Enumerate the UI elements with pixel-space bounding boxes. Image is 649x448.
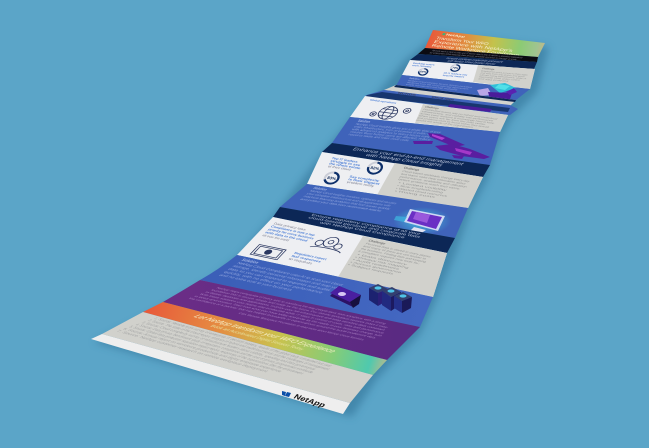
challenge text: the business. Finding data and keeping [360,247,428,263]
panel: purple summary: foundation that is secure, simple and ready for the future. Our remote workplace services make it easy [210,289,389,329]
panel: second solution: resource waste and lower cloud costs [347,132,411,142]
panel: first solution: Solution [409,77,421,81]
stat text: Top IT leaders [331,156,359,164]
challenge text: before problems reach their users: [398,177,461,191]
challenge text: • Wasted cloud resources [395,186,449,198]
purple strip [448,104,492,112]
panel: second solution: resolve them before users are affected, reduce [349,130,432,142]
panel: purple summary [163,280,420,360]
challenge text: Cloud-based workloads change every day [402,169,471,183]
challenge text: Employees need access to their apps [481,70,528,76]
challenge text: Challenge [424,105,440,110]
stat text: is their biggest [348,177,380,186]
challenge text: when users are far from the data center [418,115,487,126]
page shadow [94,34,549,417]
navy heading band 2: with NetApp Cloud Insights [363,153,444,168]
donut chart: 70% [452,66,460,70]
icon: vault [250,244,286,260]
donut chart: 83% [323,172,341,184]
stat text [322,156,388,189]
references panel: 1. Source: Remote work survey of enterprise IT decision makers, results of the global study conducted last year [153,316,335,368]
challenge text: performance, availability and utilization [399,175,469,189]
stat text: problem today [346,180,375,188]
challenge text: Challenge [482,68,495,71]
challenge text: Distributed teams rely on hybrid and multicloud [422,108,499,121]
icon: vault box and server stacks [330,284,412,313]
panel: stats and cloud insights [307,152,483,208]
panel: second solution: with advanced analytics to detect issues early and [351,127,439,139]
header banner [425,30,545,57]
infographic page [91,30,545,414]
call to action banner [143,302,387,375]
fold strip [365,85,518,115]
panel: third solution: NetApp Cloud Insights monitors, optimizes and secures [309,189,399,205]
panel: second solution: entire infrastructure, from on premises to public cloud, [353,125,438,137]
panel: third solution [280,184,468,238]
stat text: Regulators expect [293,251,329,261]
panel: compliance solution: NetApp Cloud Compliance uses AI to scan your cloud [236,261,345,286]
panel: purple summary: With these solutions your teams stay productive while IT stays in control of costs, risks and performance [199,293,385,334]
challenge text: and data from any device and place [480,72,525,78]
challenge text: • Slow troubleshooting [397,184,445,194]
icon: cloud and people [310,235,352,253]
panel: first challenge [402,60,535,89]
panel: third solution: machine learning analytics that find issues quickly [302,195,392,211]
header title: Experience with NetApp's [433,40,515,53]
stat text: work remotely [412,64,433,68]
panel: purple summary: NetApp helps companies of every size to transform the way people work from anywhere, with a strong [215,287,387,325]
panel: compliance solution: quickly, with no effect on your performance [222,270,326,294]
panel: first solution: NetApp Virtual Desktop Service delivers persistent [407,79,473,89]
panel: first solution [396,75,530,100]
challenge text: • Rising costs [394,189,438,199]
challenge text [415,105,501,131]
stat text: struggle to see [330,159,361,167]
challenge text: across the whole of the organization [415,119,475,129]
challenge text: • Limited visibility [398,181,449,192]
challenge text: and problems must be found before they spread [416,117,491,129]
challenge text: • Data discovery [356,253,410,266]
NetApp logo: NetApp [292,392,328,409]
challenge text: across every resource is increasingly hard to keep [419,112,496,125]
stat text: Desktop users [413,62,436,66]
panel: second solution [332,117,500,165]
references panel: 7. Source: NetApp customer research on remote workplace deployment [115,329,271,373]
references panel: 3. Source: Cloud complexity survey of infrastructure leaders about visibility, spending and data governance [140,321,319,371]
panel: third solution: your complete infrastructure and all applications with [306,192,392,207]
icon: monitor [393,207,451,235]
donut chart: 83%: 83% [326,175,337,181]
stat text: Compliance is now a top [270,225,316,237]
stat text: fast responses [290,254,322,263]
challenge text: without losing performance, while IT [479,74,528,80]
stat text: with data in the cloud [263,231,309,242]
challenge text: • Subject requests [347,263,396,275]
donut chart: 82%: 82% [370,165,380,171]
panel: compliance solution: storage, identify personal information and map your [231,264,344,290]
challenge text: infrastructure, and visibility into performance [421,110,495,122]
icon: globe with gears [368,104,412,122]
panel: second challenge [350,96,508,133]
panel: first solution: desktops from the cloud with fast deployment, [406,81,470,90]
header title [431,32,527,57]
stat text [246,222,349,267]
navy heading band 3: with NetApp Cloud Compliance [319,221,406,240]
challenge text: Challenge [403,166,420,172]
stat text: of their cloud [327,164,352,172]
challenge text: must keep costs under control [479,76,521,82]
challenge text: it compliant requires new tools for: [357,250,421,265]
navy heading band 3: cloud-based personal and corporate data [307,216,421,239]
panel: second solution: Solution [357,119,371,124]
panel: compliance solution: data so you can respond to requests and audits [227,267,333,292]
panel: purple summary: in every environment. Start from what you have today and grow as the needs of your business change, with [193,295,384,337]
stat text: security matters [442,74,465,79]
references panel: 2. Source: The state of the cloud report, analysis of hybrid and multicloud trends and the challenges of management [146,319,333,371]
header title: Transform Your WFO [435,36,490,46]
panel: second solution: NetApp Cloud Insights gives you a single view of your [355,122,442,134]
stat text: Of IT leaders say [443,73,468,76]
panel: third solution: Solution [312,186,329,191]
icon: cloud cubes [477,83,517,99]
donut chart: 82% [366,162,384,175]
challenge text: • Access governance [349,261,404,274]
navy heading band 1: with NetApp Virtual Desktop Service [446,60,497,65]
panel: compliance solution [200,255,433,327]
footer strip [91,334,350,414]
black intro band: Remote work is here to stay and IT teams need a way to deliver a seamless experience [431,50,524,59]
fold heading text: Cloud apps [431,95,456,101]
black intro band [418,48,538,62]
icon: purple world map [413,133,490,159]
references panel: 4. Source: Data privacy benchmark study of regulatory compliance and the cost of privacy programmes worldwide [134,323,316,374]
navy heading band 1 [410,54,537,69]
references panel [102,312,373,403]
references panel: 5. Source: Global data protection regulation impact report, responses of the organizations after the enforcement [128,325,306,375]
stat text [409,62,471,79]
black intro band: for employees while keeping data secure, available and easy to manage at scale [428,52,518,61]
blue note: Global operations [369,98,398,105]
panel: purple summary: Click Remote Workplace Foundation to read more about NetApp Cloud Services [237,312,366,341]
challenge text [478,68,530,84]
stat text: Say complexity [349,175,380,183]
panel: compliance solution: and no extra cost to your business [218,273,294,291]
challenge text: • Privacy risk mapping [354,255,411,270]
challenge text: Personal data is stored in many places [365,242,433,258]
header title: NetApp [445,33,466,38]
call to action banner: Let NetApp transform your WFO Experience [191,314,339,354]
panel: compliance solution: Solution [239,258,260,265]
challenge text [345,239,436,279]
navy heading band 3 [273,207,455,253]
stat text: the whole estate [328,162,362,170]
challenge text [392,166,473,203]
fold heading text [397,91,456,101]
challenge text: and data protected [478,78,509,83]
stat text: all over the world [261,234,290,242]
navy heading band 1: Increase employee productivity and ensure [445,57,505,63]
fold heading text: NCROS [397,91,417,97]
navy heading band 2: Enhance your end-to-end management [351,148,465,167]
stat text: priority for every business [267,228,315,240]
donut chart: 64% [420,70,427,74]
header title: Remote Workplace Foundation [431,43,521,57]
stat text: Data privacy laws [273,222,307,231]
references panel: 6. Source: Annual report on workforce productivity and digital employee experience [122,327,285,373]
panel: compliance [237,217,447,297]
challenge text: Challenge [367,239,387,245]
challenge text: and many of them are not known to [362,245,428,260]
panel: first solution: simple management and high availability [405,83,458,91]
panel: third solution: and protect your data from ransomware attacks [299,198,384,213]
navy heading band 2 [322,143,490,177]
call to action banner: Book an Accelerated Digital Session Today [208,325,306,351]
challenge text: and teams need clear information about [400,172,467,185]
stat text: to requests [288,257,314,265]
challenge text: • Audit readiness [351,258,402,271]
panel: purple summary: the confidence of a partner that has helped thousands of organizations around the world modernize data. [188,297,378,339]
panel: purple summary: to deliver desktops and applications, monitor your full infrastructure and keep sensitive data compliant. [204,291,387,331]
navy heading band 3: Ensure regulatory compliance of all your [310,213,422,236]
